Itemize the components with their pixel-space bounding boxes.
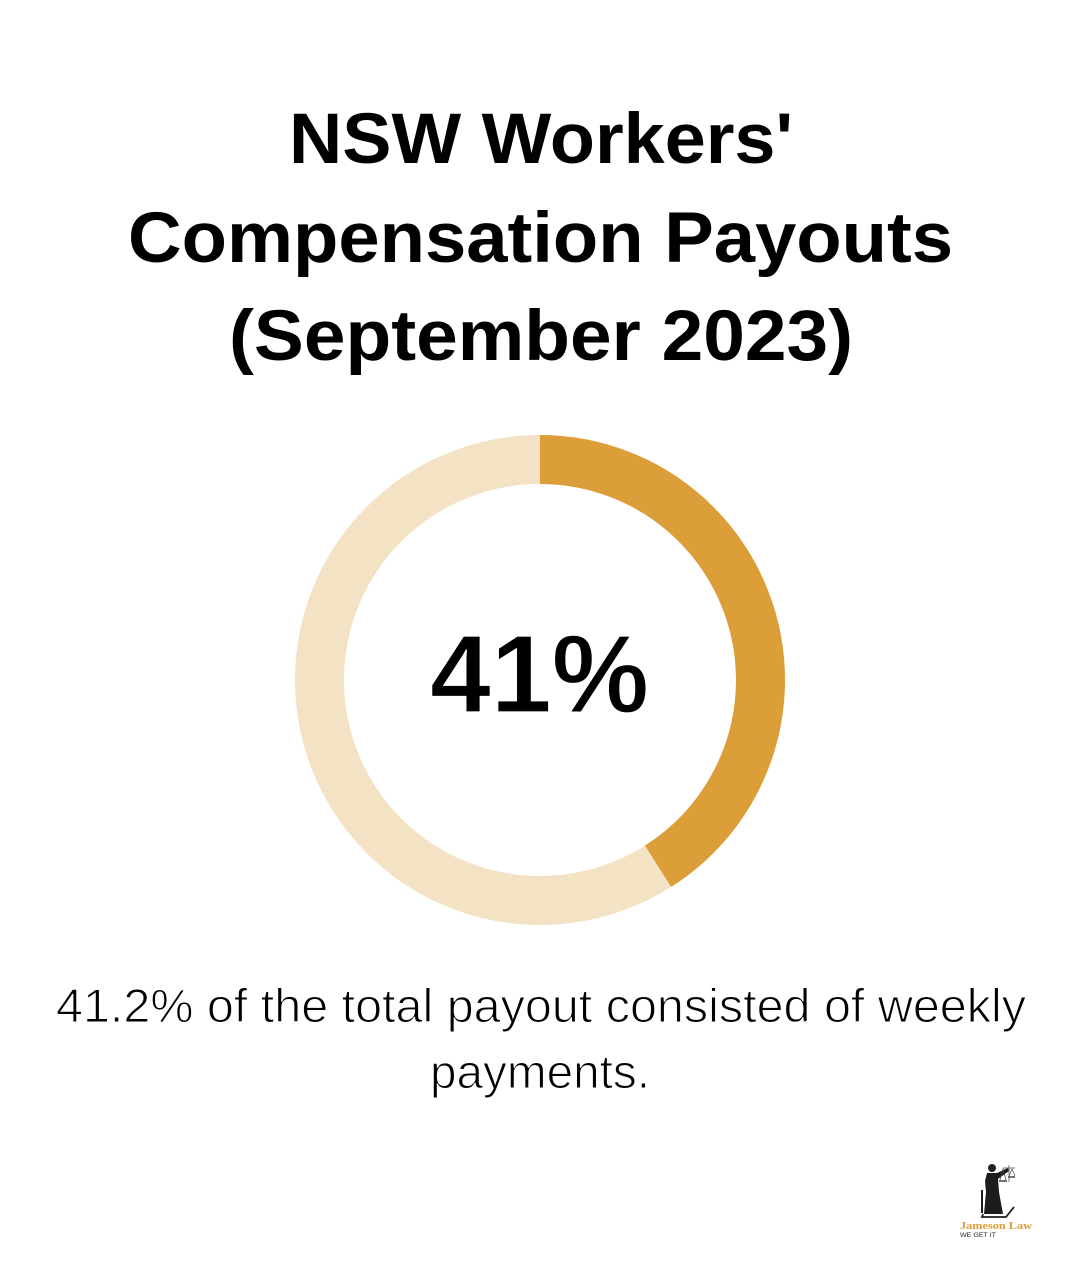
title: Compensation Payouts [128, 199, 953, 278]
caption: 41.2% of the total payout consisted of weekly [56, 979, 1027, 1032]
logo: Jameson Law [960, 1164, 1032, 1239]
donut chart: 41% [320, 460, 760, 900]
caption: payments. [430, 1045, 650, 1098]
logo tagline: WE GET IT [960, 1232, 996, 1239]
logo wordmark: Jameson Law [960, 1221, 1032, 1232]
title: NSW Workers' [289, 100, 793, 179]
center value: 41% [430, 613, 649, 736]
title [128, 100, 953, 376]
icon: lady justice [981, 1164, 1015, 1217]
title: (September 2023) [229, 297, 853, 376]
caption [56, 979, 1027, 1098]
